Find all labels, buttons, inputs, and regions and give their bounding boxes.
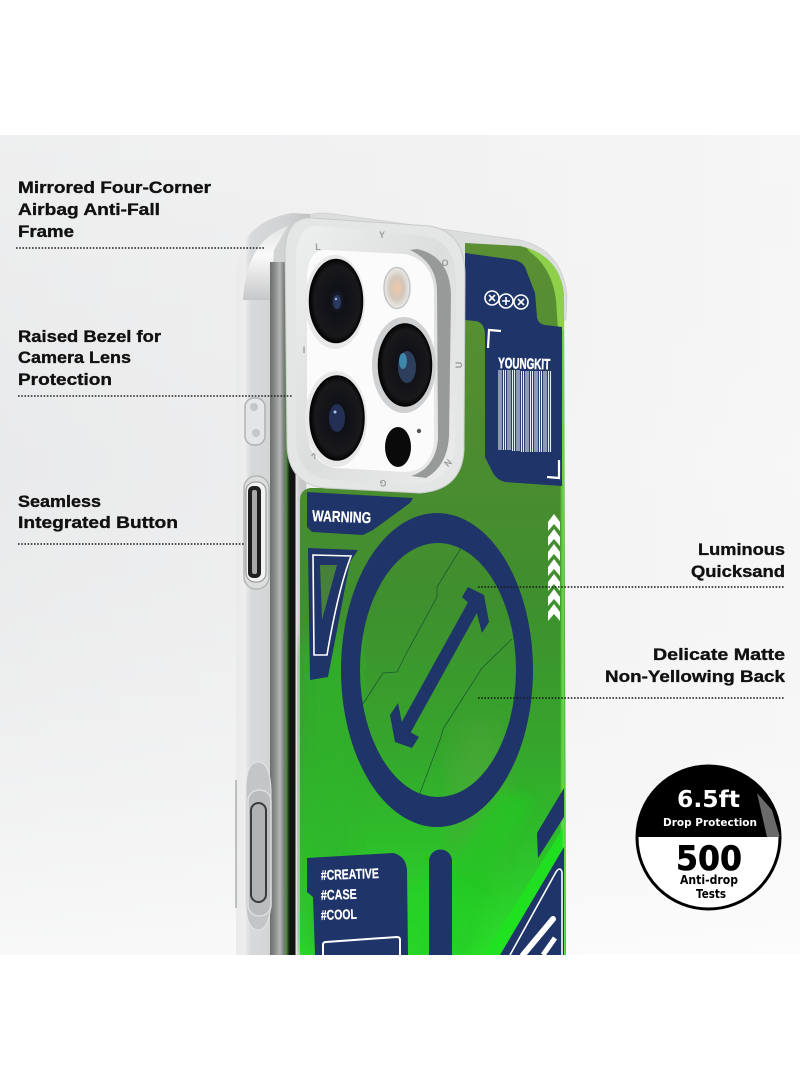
drop protection badge: Tests [696,887,726,901]
green back [300,243,566,955]
left wedge shape [308,548,358,680]
bezel letters: O [441,258,449,268]
label: raised bezel: Raised Bezel for [18,327,161,346]
bezel letters [303,230,464,488]
drop protection badge: Drop Protection [663,816,757,829]
label: matte back: Non-Yellowing Back [605,667,786,686]
hashtag block: #CREATIVE [321,865,379,883]
label: seamless button [18,492,245,544]
bezel letters: K [309,449,321,461]
thin circuit lines [363,548,512,793]
icon: three screws [485,291,528,309]
clear case side [235,213,310,955]
camera lens 2 [372,317,436,413]
camera lens 1 [305,255,365,349]
hashtag block: #CASE [321,886,357,903]
label: matte back [478,645,786,698]
drop protection badge: 500 [676,839,742,879]
label: seamless button: Integrated Button [18,513,178,532]
bezel letters: U [454,362,464,368]
top right navy block [465,253,562,486]
label: luminous quicksand: Luminous [698,540,785,559]
magnetic ring [341,513,533,827]
camera plate [307,250,434,472]
label: mirrored four-corner frame: Frame [18,222,74,241]
label: raised bezel: Camera Lens [18,348,131,367]
phone case illustration [235,213,567,965]
hashtag block: #COOL [321,906,357,923]
lower right triangle [500,847,564,955]
label: luminous quicksand [478,540,785,587]
barcode [499,370,550,452]
bezel letters: L [315,242,321,252]
flash [384,268,410,308]
label: seamless button: Seamless [18,492,101,511]
microphone [417,429,421,433]
lidar [385,427,411,467]
label: mirrored four-corner frame: Mirrored Four-Corner [18,178,211,197]
hashtag block [307,853,408,955]
drop protection badge: Anti-drop [680,873,738,887]
white chevrons [548,514,560,621]
vertical pill [429,850,452,955]
drop protection badge [636,764,782,910]
bezel letters: Y [379,230,385,240]
camera bezel [285,218,465,493]
label: mirrored four-corner frame [16,178,265,248]
double arrow [390,587,489,748]
lower right stripe [537,788,564,858]
clear case top rim [270,213,567,320]
warning tag [307,492,413,535]
label: raised bezel [18,327,292,396]
bezel letters: I [303,345,305,355]
brand text: YOUNGKIT [498,355,550,373]
bezel letters: G [379,478,387,488]
icon: lower side button [246,762,271,930]
bezel letters: N [442,457,454,469]
drop protection badge: 6.5ft [677,785,740,813]
label: mirrored four-corner frame: Airbag Anti-Fall [18,200,160,219]
icon: small upper button [245,398,265,445]
camera lens 3 [305,371,367,467]
label: matte back: Delicate Matte [653,645,785,664]
label: luminous quicksand: Quicksand [691,562,785,581]
icon: integrated power button [244,476,269,589]
warning tag: WARNING [312,508,371,527]
corner brackets [488,330,559,478]
label: raised bezel: Protection [18,370,112,389]
